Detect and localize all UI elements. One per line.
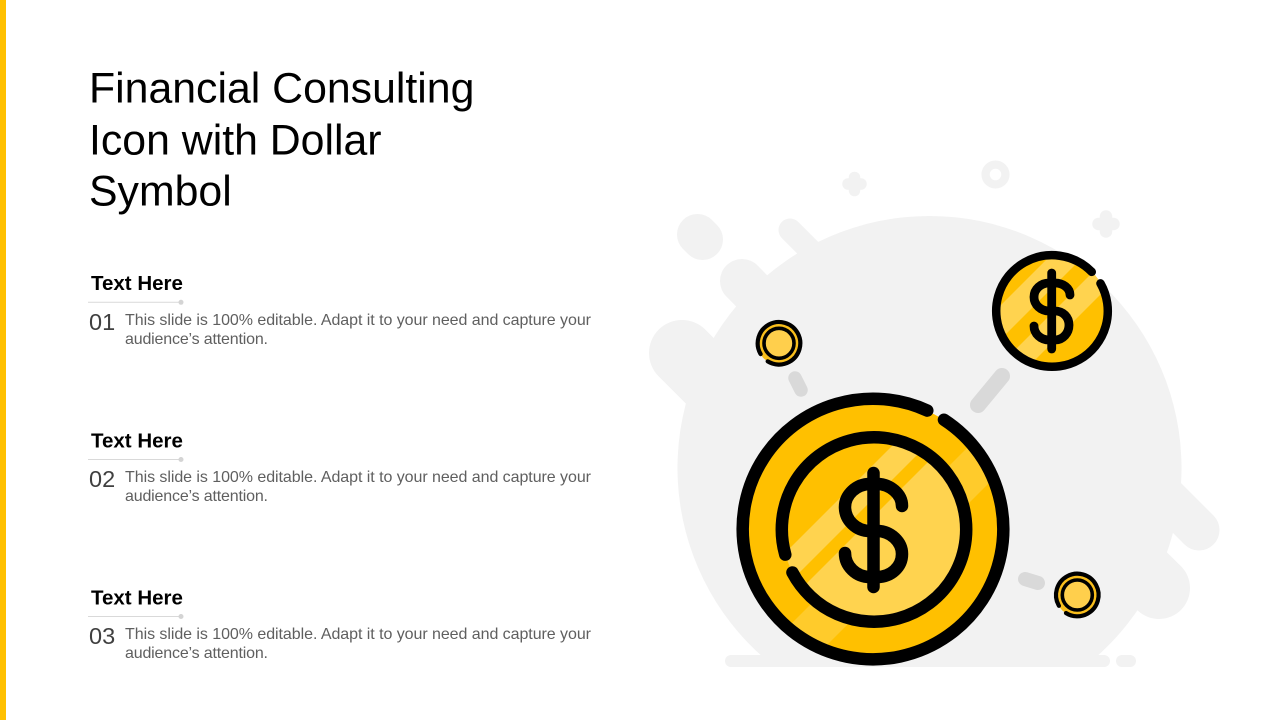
- title: Icon with Dollar: [89, 116, 382, 164]
- item 02: Text Here: [91, 430, 183, 452]
- decorative plus left: [848, 178, 861, 190]
- title: Financial Consulting: [89, 64, 474, 112]
- title: [89, 64, 474, 216]
- medium dollar coin: [992, 250, 1112, 371]
- item 01: Text Here: [91, 272, 183, 295]
- large dollar coin: [736, 392, 1010, 666]
- item 03: 03: [89, 623, 115, 649]
- item 01: [88, 272, 592, 348]
- accent bar: [0, 0, 6, 720]
- item 01: 01: [89, 309, 115, 335]
- motion dashes: [795, 376, 1038, 583]
- small coin left: [750, 314, 808, 372]
- background blob with pills: [678, 216, 1199, 667]
- decorative plus right: [1098, 216, 1114, 232]
- decorative donut: [986, 165, 1005, 184]
- item 03: [88, 586, 592, 662]
- small coin right: [1048, 566, 1106, 624]
- item 03: audience’s attention.: [125, 645, 268, 662]
- item 02: This slide is 100% editable. Adapt it to your need and capture your: [125, 469, 592, 486]
- item 01: audience’s attention.: [125, 331, 268, 348]
- item 03: Text Here: [91, 586, 183, 610]
- item 02: audience’s attention.: [125, 488, 268, 505]
- title: Symbol: [89, 168, 232, 216]
- item 01: This slide is 100% editable. Adapt it to your need and capture your: [125, 312, 592, 329]
- item 02: 02: [89, 466, 115, 492]
- item 03: This slide is 100% editable. Adapt it to your need and capture your: [125, 626, 592, 643]
- item 02: [88, 430, 592, 505]
